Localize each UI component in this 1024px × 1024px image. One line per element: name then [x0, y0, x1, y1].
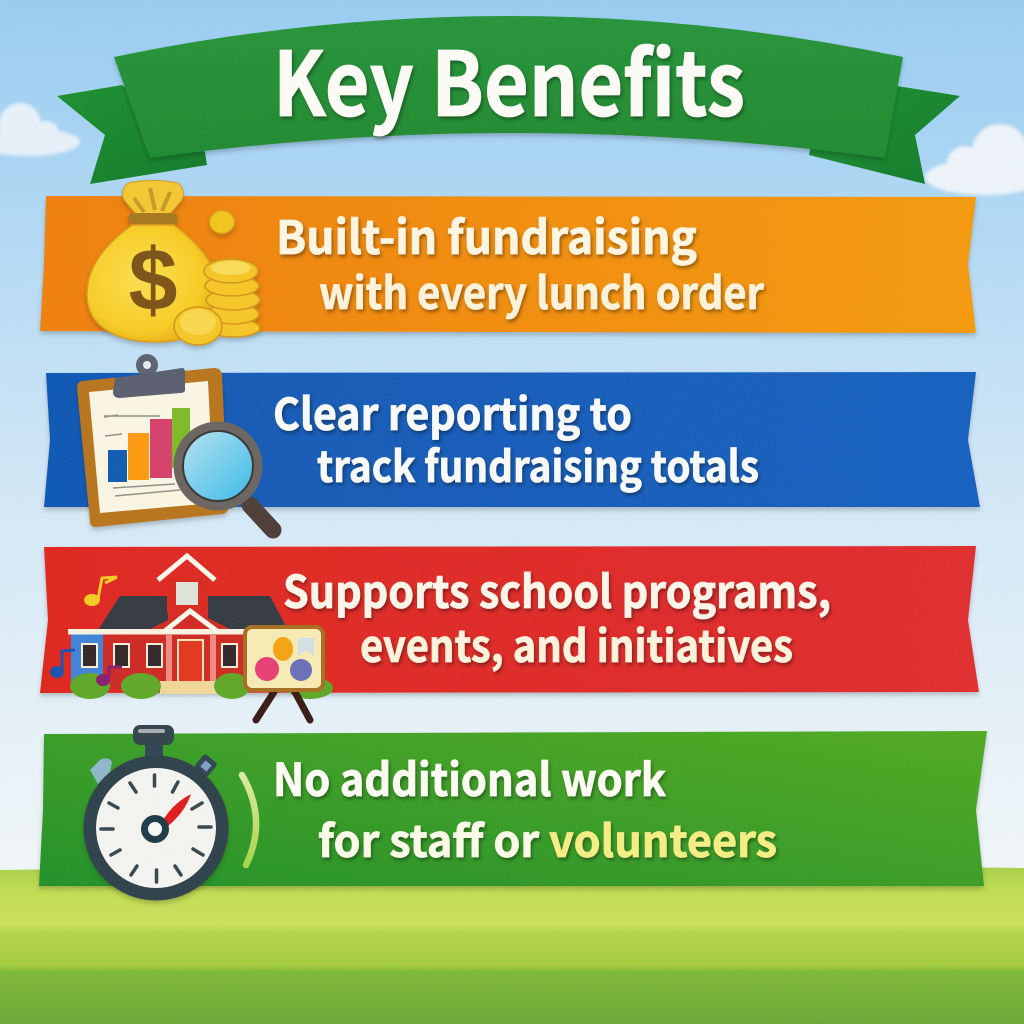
green band — [39, 731, 987, 886]
panel: no additional work: for staff or volunteers — [318, 806, 777, 870]
icon: money bag: $ — [129, 230, 177, 329]
text: Clear reporting to — [273, 379, 632, 443]
ribbon tail right — [809, 86, 960, 184]
icon: money bag — [87, 180, 260, 345]
panel: reporting — [44, 354, 980, 530]
title: Key Benefits — [273, 13, 745, 142]
text: No additional work — [273, 744, 666, 809]
panel: fundraising: with every lunch order — [319, 258, 765, 322]
orange band — [40, 196, 976, 333]
icon: stopwatch — [84, 725, 256, 900]
text: Built-in fundraising — [276, 202, 697, 268]
ribbon main — [114, 16, 903, 158]
title ribbon — [57, 13, 960, 184]
panel: school programs — [40, 546, 979, 720]
panel: reporting: track fundraising totals — [317, 433, 759, 495]
cloud left — [0, 103, 80, 156]
icon: clipboard and magnifier — [77, 354, 273, 530]
ribbon tail left — [57, 85, 207, 184]
blue band — [44, 372, 980, 507]
text: Supports school programs, — [283, 556, 831, 621]
red band — [40, 546, 979, 693]
icon: school and easel — [50, 556, 333, 720]
panel: no additional work — [39, 725, 987, 900]
panel: fundraising — [40, 180, 976, 345]
grass — [0, 865, 1024, 1024]
panel: school programs: events, and initiatives — [360, 611, 793, 675]
cloud right — [925, 124, 1024, 195]
